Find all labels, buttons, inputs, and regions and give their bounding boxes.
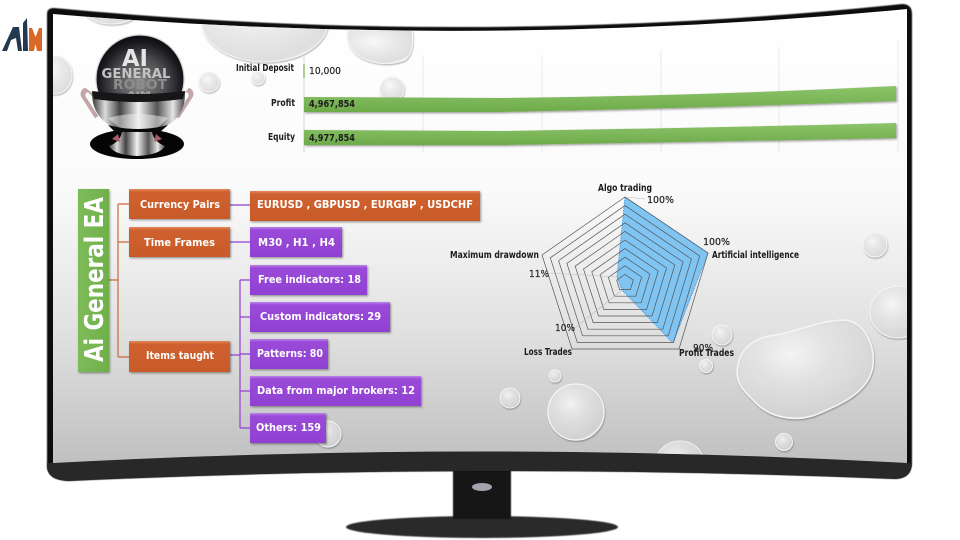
box: data from major brokers (250, 376, 421, 406)
box: others: Others: 159 (256, 422, 321, 434)
radar value labels: 90% (693, 343, 713, 354)
box: Currency Pairs (129, 189, 230, 219)
box: currency list (250, 191, 480, 221)
box: Items taught: Items taught (146, 350, 214, 362)
box: time frame list (250, 227, 342, 257)
monitor stand (346, 465, 618, 538)
bar: equity: Equity (268, 132, 296, 143)
tree connectors: orange (109, 204, 129, 357)
radar axis labels: Profit Trades (679, 348, 734, 359)
bar: profit: Profit (271, 98, 295, 109)
radar axis labels: Algo trading (598, 183, 652, 194)
radar axis labels: Maximum drawdown (450, 250, 539, 261)
box: Items taught (129, 341, 230, 372)
heading: Ai General EA: Ai General EA (80, 197, 110, 362)
bar: initial deposit (236, 63, 341, 78)
icon: AI General Robot trophy: ROBOT (113, 78, 167, 93)
box: free indicators (250, 265, 367, 295)
bar: equity (268, 123, 896, 145)
icon: AI General Robot trophy: AI (122, 46, 148, 72)
bar: initial deposit: Initial Deposit (236, 63, 294, 74)
bar: profit: 4,967,854 (309, 99, 355, 110)
box: patterns (250, 339, 328, 369)
box: others (250, 413, 326, 443)
radar axis labels: Artificial intelligence (712, 250, 799, 261)
radar data area (617, 197, 708, 343)
box: data from major brokers: Data from major brokers: 12 (257, 385, 415, 397)
radar value labels: 100% (647, 195, 674, 206)
icon: AI General Robot trophy: GENERAL (102, 67, 170, 82)
bar: initial deposit: 10,000 (309, 66, 341, 77)
bar: equity: 4,977,854 (309, 133, 355, 144)
radar chart (450, 183, 799, 359)
box: currency list: EURUSD , GBPUSD , EURGBP , USDCHF (257, 199, 473, 211)
box: custom indicators: Custom indicators: 29 (260, 311, 381, 323)
tree connectors: purple (230, 205, 250, 428)
box: Time Frames: Time Frames (144, 237, 215, 249)
box: Currency Pairs: Currency Pairs (140, 199, 220, 211)
box: Time Frames (129, 227, 230, 257)
radar value labels: 11% (529, 269, 549, 280)
box: free indicators: Free indicators: 18 (258, 274, 361, 286)
icon: AIM logo (2, 18, 42, 51)
icon: AI General Robot trophy: AIM (127, 91, 151, 98)
icon: AI General Robot trophy (81, 35, 193, 159)
monitor screen background (53, 9, 907, 463)
bar chart: deposit, profit, equity (236, 40, 898, 152)
radar axis labels: Loss Trades (524, 347, 572, 358)
box: patterns: Patterns: 80 (257, 348, 323, 360)
box: time frame list: M30 , H1 , H4 (258, 237, 335, 249)
radar axis labels (450, 183, 799, 359)
box: custom indicators (250, 302, 390, 332)
monitor frame (47, 4, 912, 481)
bar: profit (271, 86, 896, 112)
radar value labels (529, 195, 730, 354)
radar value labels: 10% (555, 323, 575, 334)
water droplets (53, 16, 907, 455)
radar value labels: 100% (703, 237, 730, 248)
